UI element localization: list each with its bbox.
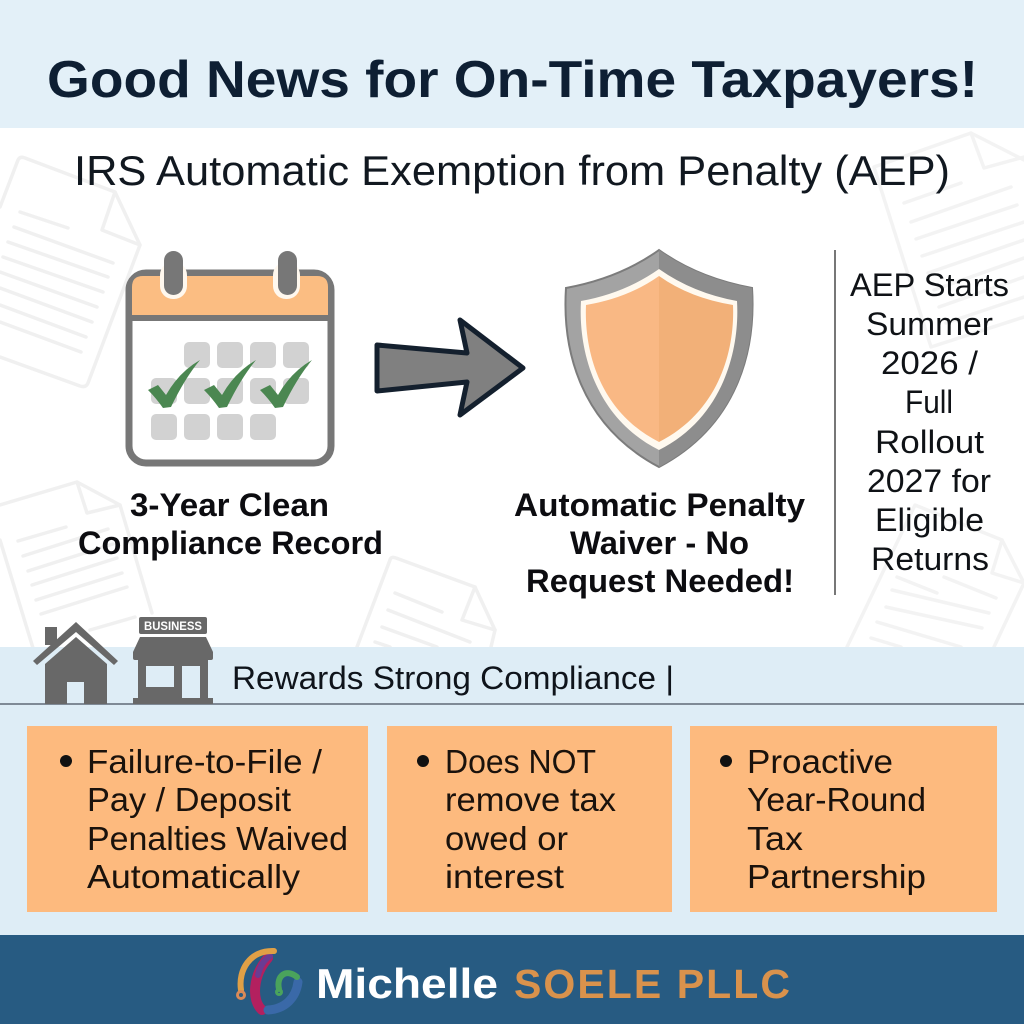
arrow bbox=[377, 320, 523, 415]
wordmark: Michelle bbox=[316, 960, 498, 1007]
footer band bbox=[0, 935, 1024, 1024]
side note: rollout timing: AEP Starts bbox=[850, 267, 1009, 303]
strip text: rewards strong compliance: Rewards Strong Compliance | bbox=[232, 660, 674, 696]
panel: tax partnership bbox=[690, 726, 997, 912]
icon: calendar with three checkmarks bbox=[129, 251, 331, 463]
header band bbox=[0, 0, 1024, 128]
side note: rollout timing bbox=[850, 267, 1009, 577]
panel: penalties waived: Pay / Deposit bbox=[87, 781, 291, 818]
panel: penalties waived: Penalties Waived bbox=[87, 820, 348, 857]
panel: tax still owed: interest bbox=[445, 858, 564, 895]
label: automatic penalty waiver: Waiver - No bbox=[570, 525, 749, 561]
label: clean compliance record bbox=[78, 487, 383, 561]
label: clean compliance record: 3-Year Clean bbox=[130, 487, 329, 523]
side note: rollout timing: Eligible bbox=[875, 502, 984, 538]
icon: shield bbox=[565, 250, 753, 467]
panel: tax still owed: remove tax bbox=[445, 781, 617, 818]
label: clean compliance record: Compliance Record bbox=[78, 525, 383, 561]
label: automatic penalty waiver: Request Needed! bbox=[526, 563, 794, 599]
logo mark bbox=[238, 951, 298, 1010]
label: automatic penalty waiver: Automatic Penalty bbox=[514, 487, 805, 523]
panel: tax partnership: Proactive bbox=[747, 743, 893, 780]
panel: penalties waived bbox=[27, 726, 368, 912]
title: Good News for On-Time Taxpayers! bbox=[47, 51, 978, 109]
panel: tax partnership: Tax bbox=[747, 820, 804, 857]
subtitle: IRS Automatic Exemption from Penalty (AEP) bbox=[74, 147, 950, 194]
panel: penalties waived: Failure-to-File / bbox=[87, 743, 323, 780]
panel: tax still owed: owed or bbox=[445, 820, 568, 857]
footer band: SOELE PLLC bbox=[514, 961, 790, 1007]
label: automatic penalty waiver bbox=[514, 487, 805, 599]
lower panel background bbox=[0, 647, 1024, 935]
panel: tax partnership: Partnership bbox=[747, 858, 926, 895]
icon: house bbox=[33, 622, 118, 704]
side note: rollout timing: Rollout bbox=[875, 424, 984, 460]
side note: rollout timing: Full bbox=[905, 384, 953, 420]
side note: rollout timing: Summer bbox=[866, 306, 993, 342]
panel: penalties waived: Automatically bbox=[87, 858, 301, 895]
side note: rollout timing: Returns bbox=[871, 541, 989, 577]
side note: rollout timing: 2027 for bbox=[867, 463, 991, 499]
panel: tax partnership: Year-Round bbox=[747, 781, 926, 818]
icon: business storefront: BUSINESS bbox=[144, 621, 202, 633]
side note: rollout timing: 2026 / bbox=[881, 345, 978, 381]
panel: tax still owed bbox=[387, 726, 672, 912]
icon: business storefront bbox=[133, 617, 213, 704]
panel: tax still owed: Does NOT bbox=[445, 743, 596, 780]
